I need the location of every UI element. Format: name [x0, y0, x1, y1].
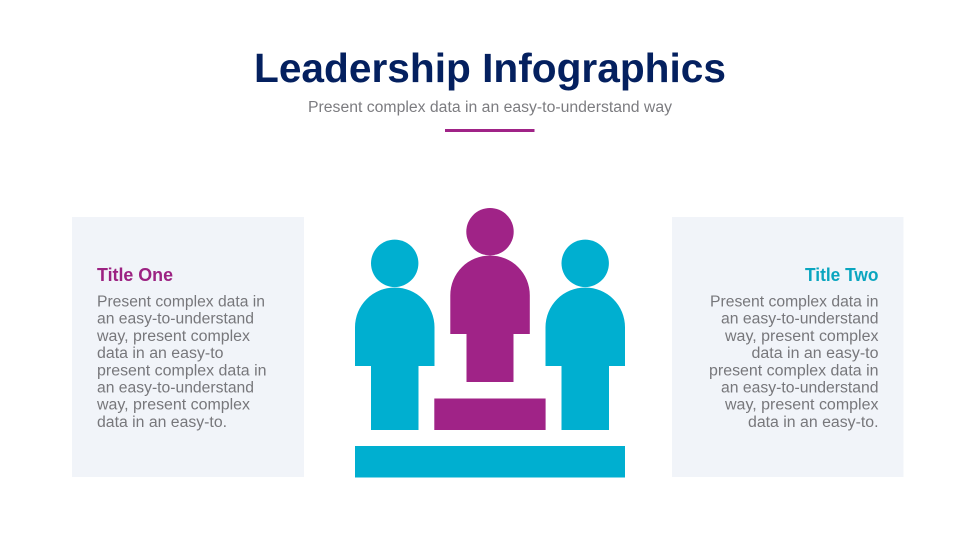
icon: right person — [546, 240, 625, 430]
heading: title two: Title Two — [805, 265, 878, 285]
icon: leadership group — [355, 208, 625, 478]
text block right: data in an easy-to. — [748, 414, 878, 431]
title: Leadership Infographics — [254, 45, 726, 91]
text block right: present complex data in — [709, 362, 878, 379]
text block left — [96, 294, 266, 431]
panel background right — [672, 217, 904, 477]
panel: title two — [672, 217, 904, 477]
text block right: Present complex data in — [710, 294, 878, 310]
heading: title one: Title One — [97, 265, 173, 285]
text block right — [709, 294, 879, 431]
text block right: way, present complex — [724, 328, 879, 345]
text block left: data in an easy-to. — [97, 414, 227, 431]
text block left: way, present complex — [96, 397, 250, 414]
text block right: an easy-to-understand — [721, 380, 878, 396]
text block left: an easy-to-understand — [97, 380, 254, 396]
large base — [355, 446, 625, 478]
text block left: data in an easy-to — [97, 345, 224, 362]
icon: center leader — [450, 208, 530, 382]
small podium — [434, 398, 546, 430]
panel: title one — [72, 217, 304, 477]
subtitle: Present complex data in an easy-to-understand way — [308, 99, 672, 116]
panel background left — [72, 217, 304, 477]
text block left: an easy-to-understand — [97, 311, 254, 328]
text block right: an easy-to-understand — [721, 311, 878, 328]
text block left: present complex data in — [97, 362, 266, 379]
text block right: data in an easy-to — [752, 345, 878, 362]
icon: left person — [355, 240, 434, 430]
text block left: Present complex data in — [97, 294, 265, 310]
text block left: way, present complex — [96, 328, 250, 345]
title underline — [445, 129, 534, 132]
text block right: way, present complex — [724, 397, 879, 414]
